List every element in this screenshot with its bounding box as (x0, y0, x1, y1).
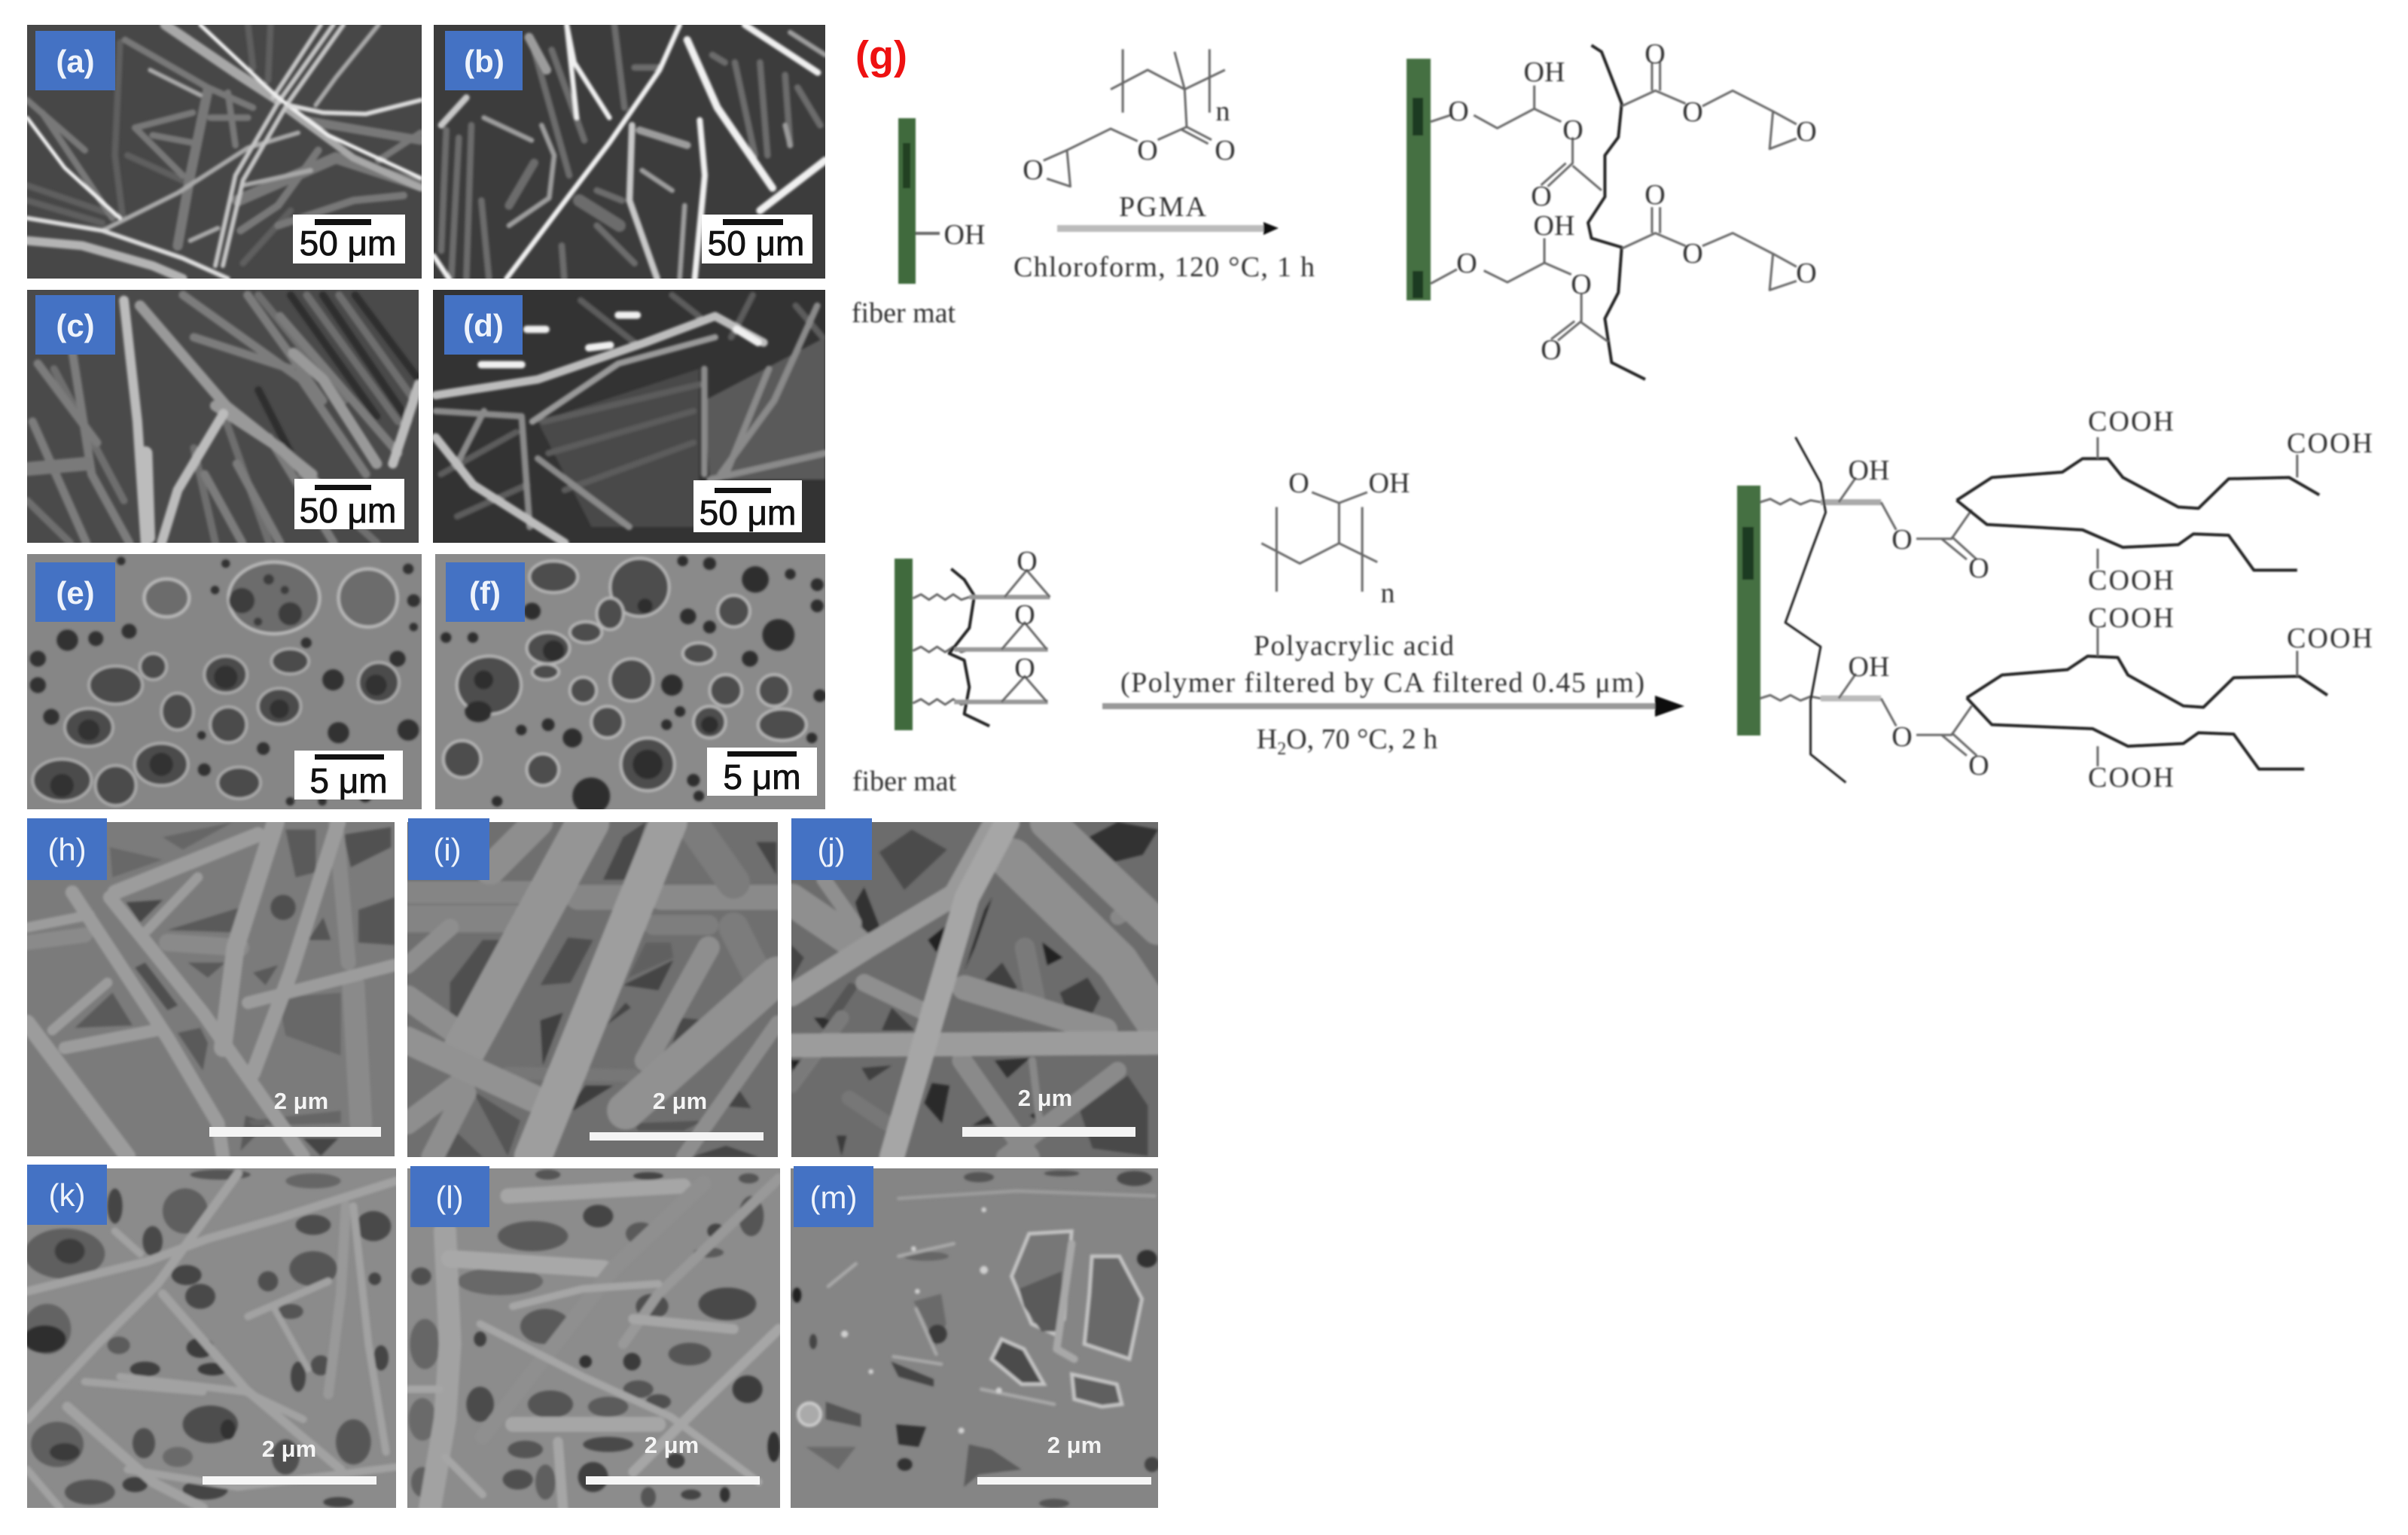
product: PGMA grafted mat: O (1644, 179, 1666, 211)
panel (a): SEM micrograph of fibers (27, 25, 422, 279)
scale bar 50 um: 50 μm (300, 224, 396, 263)
arrow and conditions (1013, 191, 1315, 283)
scale bar 2 um (977, 1432, 1151, 1485)
scale bar 2 um (586, 1432, 760, 1485)
epoxide-functional fiber mat: fiber mat (852, 766, 957, 797)
scale bar 2 um: 2 μm (274, 1088, 328, 1114)
scale bar 2 um: 2 μm (1018, 1085, 1072, 1111)
SEM image j (791, 822, 1158, 1157)
SEM image k (27, 1168, 396, 1508)
scale bar 2 um: 2 μm (645, 1432, 699, 1458)
PGMA monomer structure (1023, 49, 1236, 187)
panel (f): SEM micrograph of porous film (435, 554, 826, 815)
label (c) (35, 295, 115, 355)
product: polyacrylic acid grafted mat: COOH (2088, 406, 2174, 437)
label (e): (e) (56, 575, 95, 611)
arrow and conditions (1102, 630, 1684, 759)
product: PGMA grafted mat: OH (1524, 56, 1565, 88)
epoxide-functional fiber mat: O (1017, 546, 1038, 577)
arrow and conditions: O, 70 °C, 2 h (1286, 723, 1437, 755)
product: PGMA grafted mat: O (1456, 248, 1477, 279)
product: PGMA grafted mat: O (1541, 334, 1562, 366)
label (d): (d) (463, 308, 504, 343)
arrow and conditions: (Polymer filtered by CA filtered 0.45 μm) (1120, 667, 1644, 699)
product: PGMA grafted mat: O (1448, 96, 1469, 127)
product: polyacrylic acid grafted mat (1737, 406, 2373, 793)
polyacrylic acid structure: OH (1369, 468, 1410, 499)
product: polyacrylic acid grafted mat: COOH (2088, 565, 2174, 596)
scale bar 50 um: 50 μm (708, 224, 804, 263)
label (b) (445, 31, 523, 90)
scale bar 50 um (293, 215, 405, 263)
scale bar 2 um: 2 μm (262, 1436, 316, 1462)
scale bar 50 um (294, 479, 404, 530)
panel (k): SEM micrograph of coated nanofibers (23, 1165, 396, 1508)
product: polyacrylic acid grafted mat: OH (1849, 651, 1889, 683)
label (a) (35, 31, 115, 90)
polyacrylic acid structure: n (1381, 577, 1395, 609)
SEM image e (27, 554, 422, 809)
polyacrylic acid structure: O (1288, 468, 1309, 499)
product: PGMA grafted mat: O (1682, 238, 1703, 270)
product: polyacrylic acid grafted mat: COOH (2088, 762, 2174, 793)
product: PGMA grafted mat: O (1531, 181, 1552, 212)
scale bar 5 um: 5 μm (309, 761, 388, 800)
scale bar 5 um (294, 751, 403, 800)
heading (g): (g) (855, 33, 907, 78)
scale bar 2 um: 2 μm (1047, 1432, 1102, 1458)
label (c): (c) (56, 308, 95, 343)
arrow and conditions: 2 (1277, 739, 1286, 759)
label (j) (791, 818, 872, 880)
label (h) (27, 818, 107, 880)
SEM image m (791, 1168, 1158, 1508)
scale bar 2 um (962, 1085, 1135, 1137)
product: polyacrylic acid grafted mat: O (1891, 721, 1913, 753)
arrow and conditions: PGMA (1119, 191, 1207, 223)
product: polyacrylic acid grafted mat: O (1891, 524, 1913, 556)
panel (m): SEM micrograph of coated nanofibers (791, 1166, 1160, 1508)
product: polyacrylic acid grafted mat: O (1968, 553, 1989, 584)
panel (i): SEM micrograph of nanofibers (407, 818, 778, 1157)
PGMA monomer structure: n (1215, 96, 1230, 127)
product: polyacrylic acid grafted mat: COOH (2287, 623, 2373, 654)
SEM image f (435, 554, 825, 809)
product: polyacrylic acid grafted mat: O (1968, 750, 1989, 781)
label (e) (35, 562, 115, 622)
label (m) (794, 1166, 873, 1227)
SEM image a (27, 25, 422, 279)
scale bar 2 um (590, 1088, 764, 1141)
panel (e): SEM micrograph of porous film (27, 554, 422, 809)
product: PGMA grafted mat: O (1682, 96, 1703, 128)
label (a): (a) (56, 44, 95, 79)
panel (j): SEM micrograph of nanofibers (791, 818, 1158, 1157)
step 2: polyacrylic acid grafting (852, 406, 2373, 797)
PGMA monomer structure: O (1215, 135, 1236, 166)
PGMA monomer structure: O (1137, 135, 1158, 166)
SEM image l (407, 1168, 780, 1508)
label (m): (m) (810, 1180, 857, 1215)
scale bar 2 um: 2 μm (653, 1088, 707, 1114)
label (f) (446, 562, 525, 622)
product: PGMA grafted mat: O (1796, 257, 1817, 289)
panel (d): SEM micrograph of fibers (433, 290, 825, 543)
scale bar 5 um (707, 748, 817, 796)
product: polyacrylic acid grafted mat: COOH (2287, 428, 2373, 459)
label (j): (j) (817, 832, 846, 867)
arrow and conditions: Chloroform, 120 °C, 1 h (1013, 251, 1315, 283)
arrow and conditions: H (1257, 723, 1277, 755)
product: PGMA grafted mat (1407, 38, 1817, 379)
epoxide-functional fiber mat: O (1014, 599, 1035, 631)
fiber mat with hydroxyl: OH (944, 219, 985, 251)
SEM image c (27, 290, 419, 543)
polyacrylic acid structure (1261, 468, 1410, 609)
step 1: PGMA grafting (852, 38, 1817, 379)
PGMA monomer structure: O (1023, 154, 1044, 186)
epoxide-functional fiber mat (852, 546, 1050, 797)
scale bar 2 um (209, 1088, 381, 1137)
label (k) (27, 1165, 107, 1225)
product: PGMA grafted mat: O (1796, 116, 1817, 148)
panel (l): SEM micrograph of coated nanofibers (407, 1166, 780, 1508)
panel (b): SEM micrograph of fibers (434, 25, 825, 279)
panel (h): SEM micrograph of nanofibers (27, 818, 395, 1156)
scale bar 50 um: 50 μm (300, 491, 396, 530)
epoxide-functional fiber mat: O (1014, 653, 1035, 684)
label (l) (410, 1166, 489, 1227)
SEM image d (433, 290, 825, 543)
product: polyacrylic acid grafted mat: COOH (2088, 602, 2174, 634)
SEM image h (27, 822, 395, 1156)
panel (c): SEM micrograph of fibers (27, 290, 419, 543)
scale bar 50 um: 50 μm (700, 493, 796, 532)
scale bar 50 um (693, 480, 802, 532)
label (i): (i) (433, 832, 462, 867)
arrow and conditions: Polyacrylic acid (1254, 630, 1454, 662)
product: PGMA grafted mat: OH (1534, 210, 1574, 242)
product: PGMA grafted mat: O (1571, 269, 1592, 300)
fiber mat with hydroxyl: fiber mat (852, 297, 956, 329)
SEM image b (434, 25, 825, 279)
product: polyacrylic acid grafted mat: OH (1849, 455, 1889, 486)
product: PGMA grafted mat: O (1644, 38, 1666, 70)
scale bar 5 um: 5 μm (723, 757, 801, 796)
fiber mat with hydroxyl (852, 118, 985, 329)
label (f): (f) (469, 575, 501, 611)
label (k): (k) (49, 1177, 85, 1213)
product: PGMA grafted mat: O (1562, 114, 1583, 146)
panel (g): reaction scheme (852, 33, 2373, 797)
label (d) (444, 295, 523, 355)
label (b): (b) (464, 44, 504, 79)
SEM image i (407, 822, 778, 1157)
scale bar 2 um (203, 1436, 376, 1485)
label (l): (l) (435, 1180, 464, 1215)
label (i) (408, 818, 489, 880)
label (h): (h) (47, 832, 87, 867)
